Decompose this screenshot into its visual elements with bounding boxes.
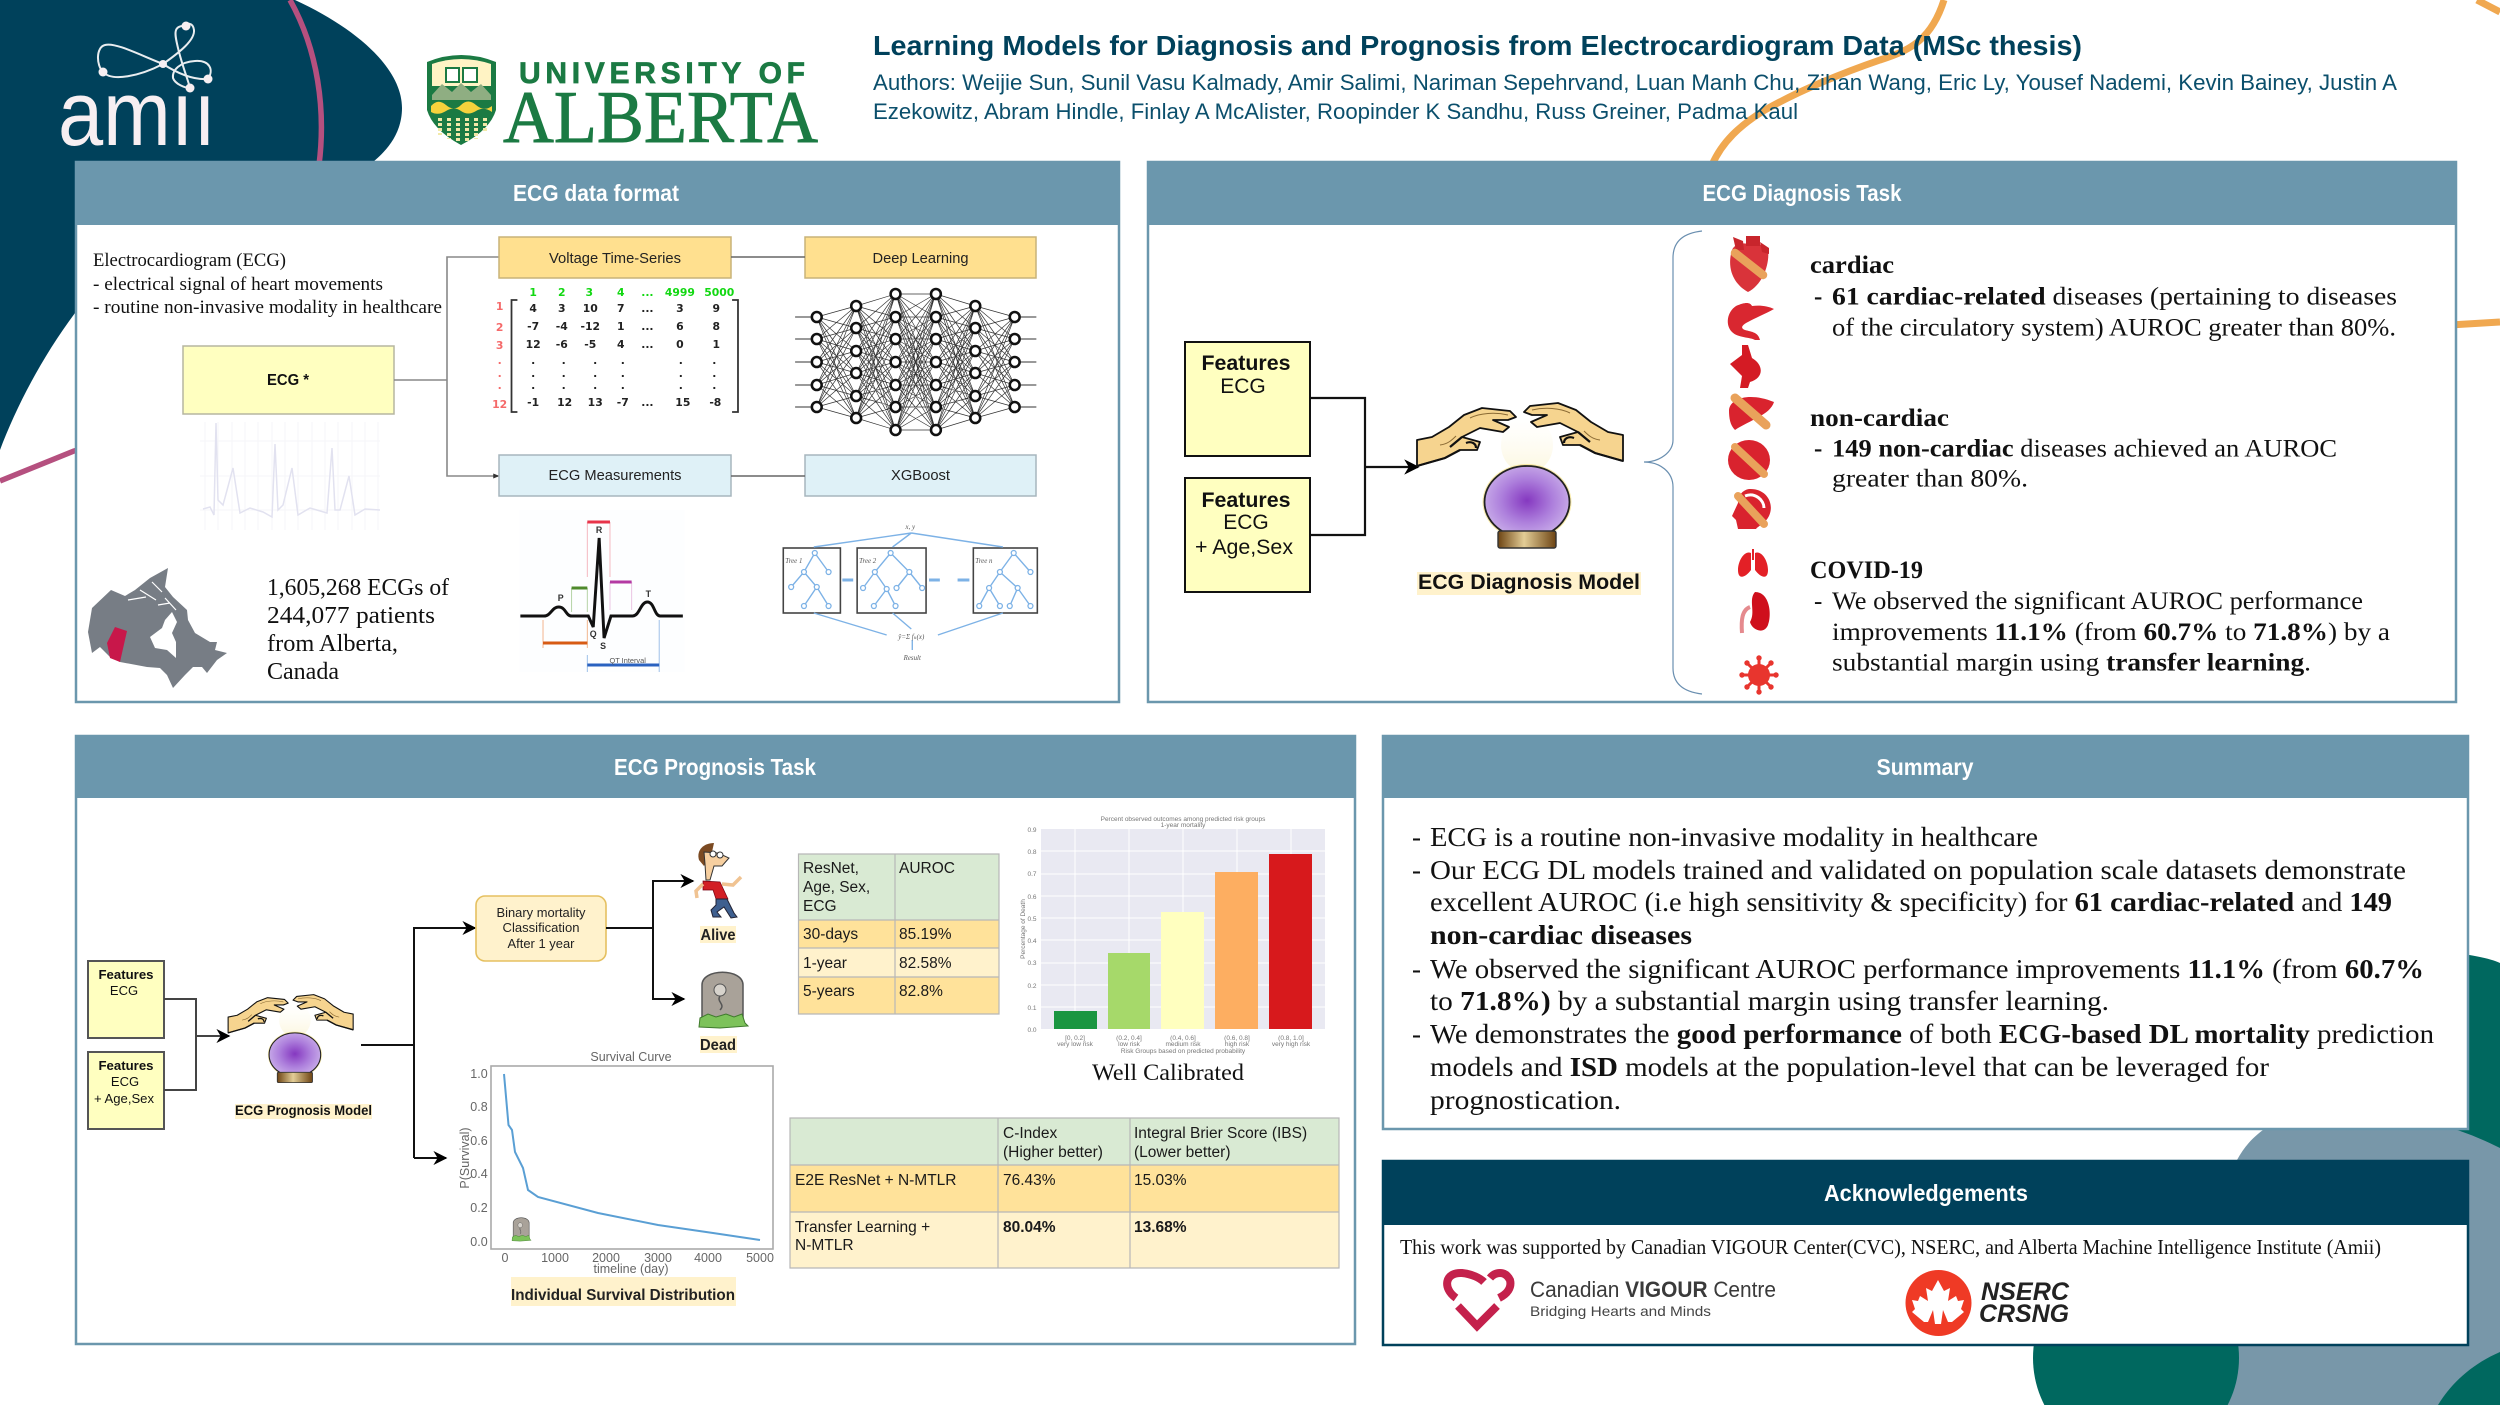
box: features ECG: Features	[98, 967, 154, 982]
decorative background: orange arc	[1712, 0, 1944, 165]
diagram: ECG waveform intervals	[519, 510, 685, 672]
text block: non-cardiac: -	[1814, 436, 1822, 462]
label: ECG Diagnosis Model: ECG Diagnosis Model	[1418, 571, 1640, 594]
label: ECG Prognosis Model: ECG Prognosis Model	[235, 1103, 372, 1118]
text block: dataset size: 244,077 patients	[267, 603, 435, 629]
table: C-index and IBS: (Lower better)	[1134, 1144, 1230, 1161]
matrix: voltage values: .	[498, 367, 502, 380]
decorative background: navy blob top-left	[0, 0, 402, 450]
authors: Authors: Weijie Sun, Sunil Vasu Kalmady, Amir Salimi, Nariman Sepehrvand, Luan Manh Chu, Zihan Wang, Eric Ly, Yousef Nademi, Kevin Bainey, Justin A	[873, 70, 2397, 95]
table: C-index and IBS: Transfer Learning +	[795, 1219, 930, 1236]
chart: survival curve: 0	[502, 1251, 509, 1265]
chart: survival curve: 4000	[694, 1251, 722, 1265]
arrow: features to model	[1310, 398, 1418, 535]
text block: summary bullets	[1412, 822, 2435, 1115]
matrix: voltage values: -8	[709, 396, 721, 409]
table: AUROC by horizon: ResNet,	[803, 860, 859, 877]
panel header: Summary	[1382, 735, 2469, 798]
icon: head	[1732, 489, 1771, 529]
heading: Summary: Summary	[1876, 754, 1974, 780]
arrows: ECG to branches	[394, 257, 499, 476]
text block: dataset size: from Alberta,	[267, 631, 398, 657]
box: binary mortality classification: Classification	[502, 920, 580, 935]
chart: survival curve: timeline (day)	[593, 1262, 669, 1276]
panel header: ECG Diagnosis Task	[1147, 161, 2457, 225]
icon: crystal ball and hands	[228, 995, 353, 1083]
matrix: voltage values: .	[712, 379, 716, 392]
box: XGBoost	[805, 455, 1036, 496]
table: AUROC by horizon: 85.19%	[899, 926, 952, 943]
chart: calibration bar chart: 0.9	[1027, 827, 1037, 834]
chart: calibration bar chart: 0.7	[1027, 871, 1037, 878]
box: ECG	[183, 346, 394, 414]
diagram: ECG waveform intervals: R	[596, 525, 603, 535]
text block: COVID-19	[1810, 557, 2390, 676]
matrix: voltage values: -7	[527, 320, 539, 333]
matrix: voltage values: .	[712, 367, 716, 380]
text block: non-cardiac	[1810, 405, 2337, 492]
table: C-index and IBS: 13.68%	[1134, 1219, 1187, 1236]
logo: NSERC CRSNG: NSERC	[1981, 1278, 2070, 1306]
diagram: ECG waveform intervals: T	[646, 589, 652, 599]
text block: non-cardiac: 149 non-cardiac diseases achieved an AUROC	[1832, 436, 2337, 462]
text block: cardiac: 61 cardiac-related diseases (pertaining to diseases	[1832, 284, 2397, 310]
matrix: voltage values: 1	[529, 286, 537, 299]
chart: survival curve: 0.6	[470, 1134, 488, 1148]
chart: survival curve: 0.8	[470, 1100, 488, 1114]
box: ECG: ECG *	[267, 372, 310, 389]
label: Alive: Alive	[700, 927, 736, 944]
arrow: features to model	[164, 999, 229, 1090]
matrix: voltage values: 13	[588, 396, 603, 409]
matrix: voltage values: 0	[676, 338, 684, 351]
matrix: voltage values: ...	[641, 286, 654, 299]
authors	[873, 70, 2397, 124]
chart: calibration bar chart: (0.2, 0.4]	[1116, 1035, 1142, 1042]
matrix: voltage values: 1	[713, 338, 720, 351]
table: C-index and IBS: 80.04%	[1003, 1219, 1056, 1236]
icon: Canada map with Alberta highlighted	[88, 568, 227, 688]
icon: virus	[1739, 655, 1779, 695]
panel header: Acknowledgements	[1382, 1160, 2469, 1225]
matrix: voltage values: 3	[586, 286, 593, 299]
label: Dead: Dead	[700, 1037, 736, 1054]
chart: calibration bar chart: [0, 0.2]	[1065, 1035, 1085, 1042]
matrix: voltage values: 3	[496, 339, 503, 352]
box: features ECG: Features	[1202, 352, 1290, 375]
text block: COVID-19: substantial margin using transfer learning .	[1832, 650, 2311, 676]
chart: survival curve: 0.0	[470, 1235, 488, 1249]
table: AUROC by horizon: 82.8%	[899, 983, 943, 1000]
table: C-index and IBS: 76.43%	[1003, 1172, 1056, 1189]
text block: cardiac	[1810, 252, 2397, 342]
box: voltage time-series: Voltage Time-Series	[549, 250, 681, 267]
box: features ECG, age, sex: Features	[98, 1058, 154, 1073]
matrix: voltage values: 8	[713, 320, 720, 333]
matrix: voltage values: .	[562, 379, 566, 392]
heading: ECG Diagnosis Task: ECG Diagnosis Task	[1702, 180, 1902, 206]
chart: calibration bar chart: (0.8, 1.0]	[1278, 1035, 1304, 1042]
logo: NSERC CRSNG: CRSNG	[1979, 1300, 2069, 1328]
label: Individual Survival Distribution	[511, 1277, 736, 1306]
chart: calibration bar chart: 1-year mortality	[1161, 822, 1206, 829]
text block: summary bullets: prognostication.	[1430, 1085, 1621, 1115]
box: features ECG: ECG	[110, 983, 138, 998]
chart: calibration bar chart: 0.2	[1027, 983, 1037, 990]
matrix: voltage values: -5	[584, 338, 596, 351]
chart: calibration bar chart: medium risk	[1165, 1041, 1201, 1048]
matrix: voltage values: 6	[676, 320, 684, 333]
arrows: classification to alive / dead	[606, 881, 693, 999]
matrix: voltage values: 4	[617, 286, 625, 299]
matrix: voltage values: 4	[617, 338, 625, 351]
diagram: ECG waveform intervals: Q	[590, 629, 597, 639]
text block: summary bullets: -	[1412, 855, 1421, 885]
logo: amii	[58, 22, 216, 165]
chart: calibration bar chart: (0.4, 0.6]	[1170, 1035, 1196, 1042]
matrix: voltage values: .	[531, 379, 535, 392]
chart: calibration bar chart: 0.1	[1027, 1005, 1037, 1012]
chart: calibration bar chart	[1020, 816, 1325, 1055]
panel: ECG Prognosis Task	[75, 735, 1356, 1344]
chart: calibration bar chart: Percent observed outcomes among predicted risk groups	[1101, 816, 1266, 823]
text block: COVID-19: We observed the significant AUROC performance	[1832, 588, 2363, 615]
matrix: voltage values: 4	[529, 302, 537, 315]
text block: ECG definition: - routine non-invasive modality in healthcare	[93, 298, 442, 318]
table: C-index and IBS: 15.03%	[1134, 1172, 1187, 1189]
matrix: voltage values: .	[531, 367, 535, 380]
box: binary mortality classification: Binary mortality	[496, 905, 586, 920]
matrix: voltage values: ...	[641, 396, 654, 409]
panel header: ECG Prognosis Task	[75, 735, 1356, 798]
chart: survival curve: 0.2	[470, 1201, 488, 1215]
wordmark: amii: amıı	[58, 63, 216, 165]
chart: faint ECG trace	[200, 422, 380, 530]
table: AUROC by horizon: 30-days	[803, 926, 858, 943]
table: AUROC by horizon: 1-year	[803, 955, 847, 972]
diagram: ECG waveform intervals: QT Interval	[610, 656, 646, 665]
box: ECG measurements	[499, 455, 731, 496]
chart: survival curve: 1000	[541, 1251, 569, 1265]
logo: University of Alberta	[427, 55, 818, 159]
matrix: voltage values: 2	[558, 286, 565, 299]
matrix: voltage values: 1	[617, 320, 625, 333]
box: features ECG, age, sex: + Age,Sex	[94, 1091, 154, 1106]
box: voltage time-series	[499, 237, 731, 278]
text block: cardiac: -	[1814, 284, 1822, 310]
decorative background: teal blob right	[2440, 950, 2500, 1165]
icon: university shield	[427, 55, 496, 145]
matrix: voltage values: -6	[556, 338, 568, 351]
box: features ECG: ECG	[1220, 375, 1266, 398]
text block: summary bullets: excellent AUROC (i.e high sensitivity & specificity) for 61 cardiac-related and 149	[1430, 887, 2392, 917]
icon: running person	[696, 843, 741, 918]
matrix: voltage values: 4999	[665, 286, 695, 299]
matrix: voltage values: .	[498, 379, 502, 392]
matrix: voltage values: .	[621, 379, 625, 392]
matrix: voltage values: .	[593, 379, 597, 392]
label: Individual Survival Distribution: Individual Survival Distribution	[511, 1287, 735, 1304]
panel header: ECG data format	[75, 161, 1120, 225]
chart: calibration bar chart: Percentage of Death	[1020, 899, 1027, 959]
box: features ECG, age, sex: Features	[1202, 489, 1290, 512]
diagram: ECG waveform intervals: S	[600, 641, 606, 651]
diagram: neural network	[795, 289, 1036, 435]
panel: ECG data format	[75, 161, 1120, 702]
box: features ECG, age, sex	[1185, 478, 1310, 592]
chart: calibration bar chart: very high risk	[1272, 1041, 1311, 1048]
matrix: voltage values: .	[712, 354, 716, 367]
panel: Acknowledgements	[1382, 1160, 2469, 1345]
logo: Canadian VIGOUR Centre	[1447, 1273, 1776, 1326]
text block: summary bullets: Our ECG DL models trained and validated on population scale datasets demonstrate	[1430, 855, 2406, 885]
decorative background: blue-grey blob	[2140, 1125, 2500, 1405]
chart: calibration bar chart: 0.6	[1027, 894, 1037, 901]
text block: non-cardiac: greater than 80%.	[1832, 466, 2028, 492]
chart: calibration bar chart: 0.3	[1027, 960, 1037, 967]
diagram: XGBoost trees: x, y	[905, 523, 916, 531]
matrix: voltage values: .	[679, 354, 683, 367]
table: C-index and IBS: E2E ResNet + N-MTLR	[795, 1172, 957, 1189]
brace	[1644, 231, 1702, 694]
box: features ECG	[88, 961, 164, 1038]
heading: Acknowledgements: Acknowledgements	[1824, 1180, 2028, 1206]
icon: lungs	[1738, 549, 1768, 577]
matrix: voltage values: .	[498, 354, 502, 367]
chart: survival curve: 3000	[644, 1251, 672, 1265]
chart: calibration bar chart: 0.0	[1027, 1027, 1037, 1034]
title: Learning Models for Diagnosis and Prognosis from Electrocardiogram Data (MSc thesis)	[873, 30, 2082, 61]
matrix: voltage values: 5000	[704, 286, 735, 299]
icon: pancreas	[1728, 303, 1774, 340]
table: C-index and IBS: N-MTLR	[795, 1237, 854, 1254]
text block: summary bullets: models and ISD models at the population-level that can be leveraged for	[1430, 1052, 2269, 1082]
matrix: voltage values: -4	[556, 320, 568, 333]
text block: summary bullets: -	[1412, 954, 1421, 984]
matrix: voltage values: ...	[641, 302, 654, 315]
box: ECG measurements: ECG Measurements	[548, 467, 682, 484]
table: C-index and IBS	[790, 1118, 1339, 1268]
chart: survival curve: 0.4	[470, 1167, 488, 1181]
authors: Ezekowitz, Abram Hindle, Finlay A McAlister, Roopinder K Sandhu, Russ Greiner, Padma Kaul	[873, 99, 1798, 124]
icon: heart	[1730, 236, 1769, 292]
wordmark: university of: UNIVERSITY OF	[519, 57, 805, 90]
chart: survival curve: 1.0	[470, 1067, 488, 1081]
matrix: voltage values: .	[593, 354, 597, 367]
text block: COVID-19: improvements 11.1% (from 60.7% to 71.8%) by a	[1832, 619, 2390, 646]
matrix: voltage values: .	[621, 354, 625, 367]
chart: survival curve: Survival Curve	[590, 1050, 672, 1064]
icon: liver	[1729, 397, 1774, 430]
matrix: voltage values: ...	[641, 338, 654, 351]
text block: summary bullets: We demonstrates the good performance of both ECG-based DL mortality prediction	[1430, 1019, 2435, 1049]
wordmark: alberta: ALBERTA	[503, 77, 818, 159]
chart: calibration bar chart: low risk	[1118, 1041, 1141, 1048]
table: AUROC by horizon: AUROC	[899, 860, 955, 877]
diagram: XGBoost trees: ŷ=Σ fₖ(x)	[897, 633, 925, 641]
box: features ECG	[1185, 342, 1310, 456]
chart: calibration bar chart: (0.6, 0.8]	[1224, 1035, 1250, 1042]
diagram: XGBoost trees: Tree 1	[785, 557, 802, 565]
matrix: voltage values: .	[593, 367, 597, 380]
matrix: voltage values: -1	[527, 396, 539, 409]
icon: pregnancy	[1730, 345, 1761, 388]
text block: dataset size: Canada	[267, 659, 339, 685]
table: C-index and IBS: (Higher better)	[1003, 1144, 1103, 1161]
decorative background: teal circle bottom	[2033, 1255, 2239, 1405]
chart: calibration bar chart: Risk Groups based on predicted probability	[1121, 1048, 1246, 1055]
chart: survival curve: 2000	[592, 1251, 620, 1265]
diagram: ECG waveform intervals: P	[558, 593, 564, 603]
matrix: voltage values: 7	[617, 302, 625, 315]
matrix: voltage values: 10	[583, 302, 598, 315]
text block: cardiac: cardiac	[1810, 252, 1894, 279]
logo: NSERC CRSNG	[1906, 1270, 2070, 1336]
matrix: voltage values: .	[562, 354, 566, 367]
box: deep learning	[805, 237, 1036, 278]
chart: calibration bar chart: 0.5	[1027, 916, 1037, 923]
text block: funding statement: This work was supported by Canadian VIGOUR Center(CVC), NSERC, and Alberta Machine Intelligence Institute (Amii)	[1400, 1235, 2381, 1259]
icon: crystal ball and hands	[1417, 403, 1623, 548]
matrix: voltage values: ...	[641, 320, 654, 333]
diagram: XGBoost trees	[783, 523, 1037, 662]
logo: Canadian VIGOUR Centre: Canadian VIGOUR Centre	[1530, 1277, 1776, 1302]
text block: summary bullets: to 71.8%) by a substantial margin using transfer learning.	[1430, 986, 2109, 1016]
chart: calibration bar chart: 0.4	[1027, 938, 1037, 945]
matrix: voltage values: 1	[496, 300, 503, 313]
heading: ECG Prognosis Task: ECG Prognosis Task	[614, 754, 816, 780]
matrix: voltage values: .	[531, 354, 535, 367]
chart: survival curve: P(Survival)	[458, 1127, 472, 1189]
text block: dataset size: 1,605,268 ECGs of	[267, 575, 449, 601]
matrix: voltage values	[492, 286, 738, 412]
box: features ECG, age, sex: ECG	[111, 1074, 139, 1089]
box: XGBoost: XGBoost	[891, 467, 951, 484]
table: AUROC by horizon	[798, 854, 999, 1014]
matrix: voltage values: 12	[492, 398, 507, 411]
table: AUROC by horizon: 5-years	[803, 983, 855, 1000]
caption: Well Calibrated: Well Calibrated	[1092, 1060, 1245, 1085]
text block: summary bullets: We observed the significant AUROC performance improvements 11.1% (from 60.7%	[1430, 954, 2424, 984]
matrix: voltage values: .	[679, 367, 683, 380]
text block: ECG definition	[93, 251, 442, 318]
matrix: voltage values: -12	[580, 320, 600, 333]
chart: survival curve: 5000	[746, 1251, 774, 1265]
table: C-index and IBS: Integral Brier Score (IBS)	[1134, 1125, 1307, 1142]
table: AUROC by horizon: ECG	[803, 898, 837, 915]
text block: COVID-19: COVID-19	[1810, 557, 1923, 584]
chart: survival curve	[458, 1050, 774, 1276]
matrix: voltage values: .	[621, 367, 625, 380]
matrix: voltage values: 9	[713, 302, 720, 315]
matrix: voltage values: -7	[617, 396, 629, 409]
matrix: voltage values: 3	[676, 302, 684, 315]
text block: dataset size	[267, 575, 449, 685]
text block: non-cardiac: non-cardiac	[1810, 405, 1949, 432]
box: features ECG, age, sex: ECG	[1223, 511, 1269, 534]
chart: calibration bar chart: very low risk	[1057, 1041, 1094, 1048]
text block: summary bullets: -	[1412, 1019, 1421, 1049]
text block: summary bullets: ECG is a routine non-invasive modality in healthcare	[1430, 822, 2038, 852]
text block: summary bullets: -	[1412, 822, 1421, 852]
table: AUROC by horizon: Age, Sex,	[803, 879, 870, 896]
chart: calibration bar chart: high risk	[1225, 1041, 1250, 1048]
diagram: XGBoost trees: Tree n	[975, 557, 993, 565]
matrix: voltage values: 12	[557, 396, 572, 409]
matrix: voltage values: .	[562, 367, 566, 380]
table: AUROC by horizon: 82.58%	[899, 955, 952, 972]
icon: kidney	[1742, 592, 1770, 633]
text block: cardiac: of the circulatory system) AUROC greater than 80%.	[1832, 314, 2396, 342]
matrix: voltage values: 3	[558, 302, 565, 315]
text block: ECG definition: - electrical signal of heart movements	[93, 275, 383, 295]
table: C-index and IBS: C-Index	[1003, 1125, 1058, 1142]
text block: COVID-19: -	[1814, 588, 1822, 615]
matrix: voltage values: 15	[675, 396, 690, 409]
decorative background: pink arc	[0, 0, 321, 481]
arrows: boxes to models	[731, 257, 805, 476]
heading: ECG data format: ECG data format	[513, 180, 679, 206]
icon: stomach	[1728, 440, 1770, 480]
matrix: voltage values: 12	[526, 338, 541, 351]
box: binary mortality classification: After 1 year	[508, 936, 575, 951]
panel: ECG Diagnosis Task	[1147, 161, 2457, 702]
logo: Canadian VIGOUR Centre: Bridging Hearts and Minds	[1530, 1303, 1711, 1319]
text block: ECG definition: Electrocardiogram (ECG)	[93, 251, 286, 271]
diagram: XGBoost trees: Result	[903, 654, 922, 662]
diagram: XGBoost trees: Tree 2	[859, 557, 877, 565]
box: binary mortality classification	[476, 896, 606, 961]
matrix: voltage values: 2	[496, 321, 503, 334]
box: features ECG, age, sex	[88, 1052, 164, 1129]
icon: gravestone	[699, 972, 748, 1028]
decorative background: teal corner	[2438, 1352, 2500, 1405]
icon: amii network symbol	[98, 22, 212, 92]
chart: calibration bar chart: 0.8	[1027, 849, 1037, 856]
box: features ECG, age, sex: + Age,Sex	[1195, 536, 1294, 559]
matrix: voltage values: .	[679, 379, 683, 392]
panel: Summary	[1382, 735, 2469, 1129]
box: deep learning: Deep Learning	[872, 250, 968, 267]
decorative background: orange arc right	[2450, 0, 2500, 325]
arrows: model to outputs	[361, 928, 475, 1158]
text block: summary bullets: non-cardiac diseases	[1430, 920, 1692, 950]
